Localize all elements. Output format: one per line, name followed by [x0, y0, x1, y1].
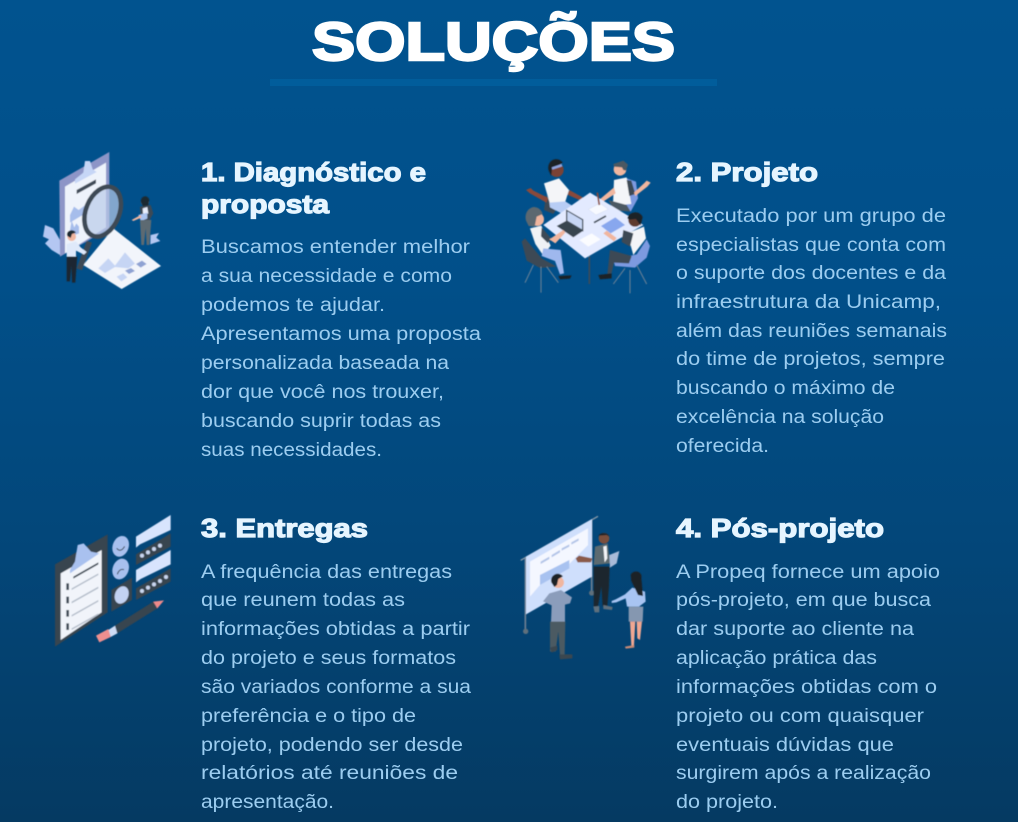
- text block 4: do projeto.: [676, 792, 778, 813]
- title: SOLUÇÕES: [312, 12, 675, 72]
- text block 3: projeto, podendo ser desde: [201, 735, 463, 756]
- text block 2: [676, 206, 947, 457]
- icon: checklist, feedback and pencil: [55, 515, 171, 647]
- text block 1: personalizada baseada na: [201, 353, 449, 374]
- text block 3: apresentação.: [201, 792, 334, 813]
- heading 1: proposta: [201, 189, 330, 219]
- text block 3: do projeto e seus formatos: [201, 648, 456, 669]
- text block 3: informações obtidas a partir: [201, 619, 471, 640]
- icon: analysis clipboard and magnifier: [43, 152, 161, 289]
- text block 3: que reunem todas as: [201, 590, 405, 611]
- icon: team meeting around table: [522, 159, 651, 293]
- icon: team at presentation board: [521, 516, 646, 659]
- text block 2: excelência na solução: [676, 407, 884, 428]
- heading 4: 4. Pós-projeto: [676, 513, 884, 543]
- text block 1: a sua necessidade e como: [201, 266, 452, 287]
- text block 3: [201, 562, 471, 813]
- text block 4: A Propeq fornece um apoio: [676, 562, 940, 583]
- text block 4: dar suporte ao cliente na: [676, 619, 914, 640]
- text block 4: pós-projeto, em que busca: [676, 590, 931, 611]
- text block 2: especialistas que conta com: [676, 235, 946, 256]
- heading 1: [201, 157, 426, 219]
- text block 4: surgirem após a realização: [676, 763, 931, 784]
- text block 4: [676, 562, 940, 813]
- text block 4: aplicação prática das: [676, 648, 877, 669]
- text block 1: podemos te ajudar.: [201, 295, 385, 316]
- text block 2: Executado por um grupo de: [676, 206, 946, 227]
- text block 4: projeto ou com quaisquer: [676, 706, 925, 727]
- text block 1: Buscamos entender melhor: [201, 237, 471, 258]
- text block 1: suas necessidades.: [201, 440, 382, 461]
- text block 4: informações obtidas com o: [676, 677, 937, 698]
- text block 2: do time de projetos, sempre: [676, 349, 945, 370]
- text block 4: eventuais dúvidas que: [676, 735, 894, 756]
- text block 3: A frequência das entregas: [201, 562, 452, 583]
- text block 1: Apresentamos uma proposta: [201, 324, 481, 345]
- text block 1: dor que você nos trouxer,: [201, 382, 444, 403]
- heading 1: 1. Diagnóstico e: [201, 157, 426, 187]
- heading 2: 2. Projeto: [676, 157, 818, 187]
- text block 2: infraestrutura da Unicamp,: [676, 292, 941, 313]
- title: [270, 12, 717, 86]
- text block 3: relatórios até reuniões de: [201, 763, 458, 784]
- text block 2: buscando o máximo de: [676, 378, 895, 399]
- text block 1: [201, 237, 481, 461]
- text block 2: além das reuniões semanais: [676, 321, 947, 342]
- text block 1: buscando suprir todas as: [201, 411, 441, 432]
- text block 2: o suporte dos docentes e da: [676, 263, 946, 284]
- text block 2: oferecida.: [676, 436, 769, 457]
- text block 3: preferência e o tipo de: [201, 706, 416, 727]
- heading 3: 3. Entregas: [201, 513, 368, 543]
- text block 3: são variados conforme a sua: [201, 677, 471, 698]
